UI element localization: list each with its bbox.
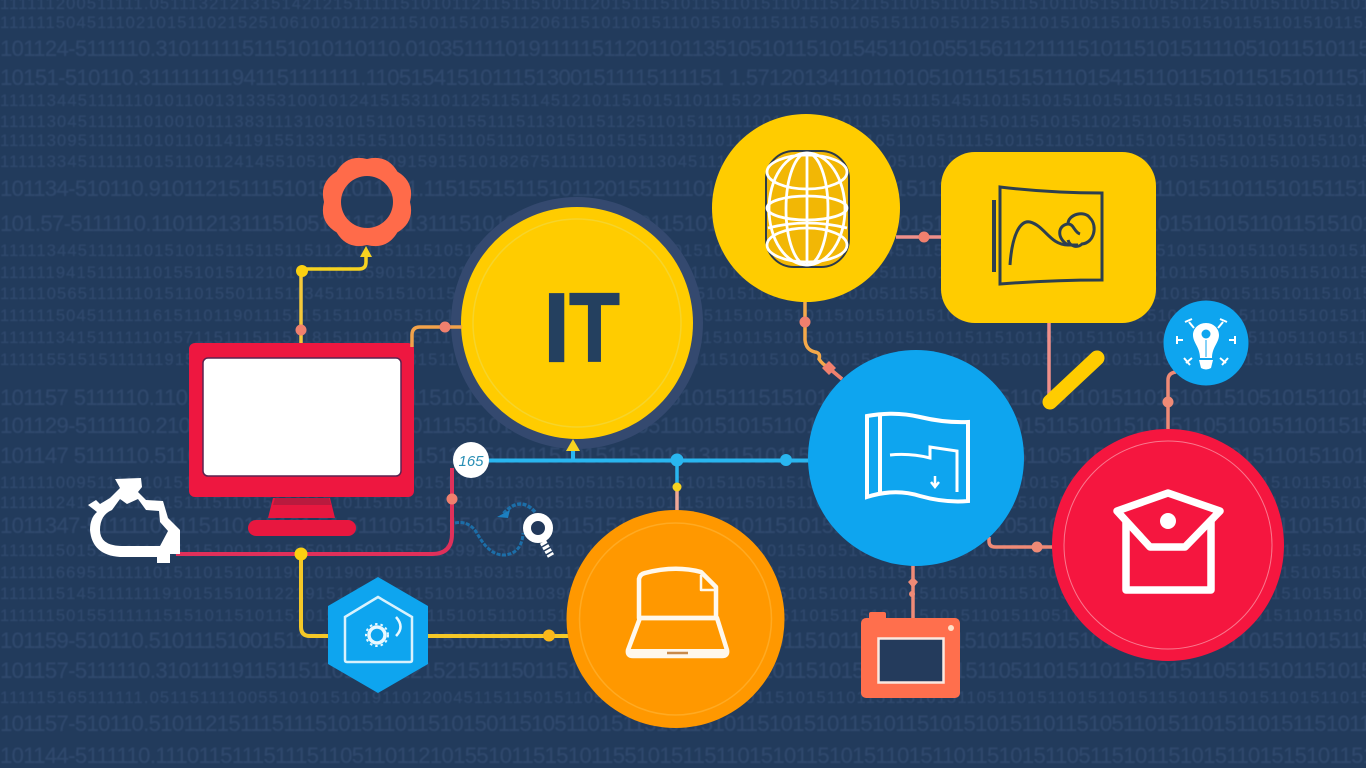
background: binary digit pattern: 111113045111111010010111383111310310151101510115511151131011511251101511111110115121101115110151111510115101511021511015110151101511510115	[0, 113, 1366, 131]
monitor screen	[203, 358, 401, 476]
monitor base	[248, 520, 356, 536]
panel: monitor	[189, 343, 414, 536]
connector: folder circle to red circle	[989, 537, 1056, 552]
connector: cloud to monitor junction (red line)	[176, 468, 452, 554]
icon: orange gear	[323, 158, 411, 246]
panel: envelope red circle	[1052, 429, 1284, 661]
background: binary digit pattern: 111111669511111101511015101119010119011011511511503151110115199504155151151101511051101511511015110151151011510151105115101151011510151101	[0, 564, 1366, 582]
background: binary digit pattern: 111113445111111015101151151151151121011511151051111510115115510151110151011510151110151104511151051151015110511015115101511015110151101511	[0, 242, 1366, 260]
camera indicator	[948, 625, 954, 631]
background: binary digit pattern: 111113095111111010110114119155133131515110115111051110101511015151113111011510151121511105110151111510115110151011510151105110151101511015	[0, 132, 1366, 150]
connector: red circle to lightbulb	[1162, 372, 1176, 430]
callout: number badge: 165	[458, 453, 484, 470]
connector: globe to image card	[896, 232, 944, 242]
background: binary digit pattern: 111111941511111101551015112101511101159015121011513911510151101305115111011510151115110151111015115110511015110151151011510151105115101151	[0, 264, 1366, 282]
monitor frame	[189, 343, 414, 497]
panel: lightbulb circle	[1164, 300, 1248, 386]
icon: globe cylinder	[766, 151, 849, 267]
heading: IT	[543, 272, 620, 383]
icon: open envelope	[1117, 493, 1220, 590]
icon: map with folder	[867, 414, 968, 501]
panel: IT circle	[451, 197, 703, 449]
connector: monitor to gear (yellow line)	[296, 246, 372, 343]
panel: globe circle	[712, 114, 900, 302]
panel: image card	[941, 152, 1156, 323]
panel: laptop orange circle	[566, 510, 784, 728]
icon: blue squiggle and magnifier	[455, 504, 551, 556]
background: binary digit pattern: 111111501511111101511510011215050111501155711599155015111101511011510151105110115101510151151101511015115101511011510151105110151151011515	[0, 542, 1366, 560]
heading: IT: I	[543, 272, 570, 382]
connector dot on red line	[446, 494, 458, 504]
icon: yellow pencil bar	[1050, 358, 1097, 402]
connector: yellow line to hexagon and laptop	[294, 548, 572, 642]
monitor stand	[268, 498, 335, 518]
background: binary digit pattern: 111111009511111101511015121151101511101151015110151130115105115101115101511051151015110151101511510115101511011510151105110151151011510151	[0, 474, 1366, 492]
background: binary digit pattern: 111113445111111010110013133531001012415153110112511511451210115101511011151211511015110115111514511011510151101511015115101511015110151151	[0, 92, 1366, 110]
background: binary digit pattern: 111115515151111119151151011510115101511573151101115105115101151015110511510115101151015110151115101151015110511015115101511015110151101511	[0, 351, 1366, 369]
background: binary digit pattern: 111111241511111101511151101510111510115101511051101151015115101151011151011510151101151015110151151011510151105110151101511015115101151015	[0, 494, 1366, 512]
connector: folder circle to camera	[908, 564, 918, 620]
icon: framed picture	[994, 187, 1102, 284]
heading: IT: T	[569, 274, 620, 383]
background: binary digit pattern: 111111514511111119101515101122191511511151151015110311039055111510151101511011510151011511015110511011510151105110151101511510115101511015	[0, 585, 1366, 603]
connector: globe to folder circle	[800, 300, 842, 379]
icon: white cloud outline	[88, 478, 180, 563]
background: binary digit pattern: 111113345111111015110112414551051011511091591151018267511111101011304511101151011151015110511015110115101511015110511015115101151015110151	[0, 153, 1366, 171]
connector: image card to yellow pencil	[1047, 320, 1051, 395]
background: binary digit pattern: 111111501551111115151011510115101511051151011510151101151015110151101511051101511015115101115101511015110511510115101511015110151101151015	[0, 607, 1366, 625]
camera window	[878, 638, 944, 682]
background: binary digit pattern: 111115165111111.05115111100551010151019110120045115115015110511015110151151011510151101151151015110511015110151101511510115101511015110151	[0, 689, 1366, 707]
panel: orange camera	[861, 612, 960, 698]
background: binary digit pattern: 111110565111111015110155011151134511015151011511101151011015101511511151015110151135101051155110151151015110511011511015110151151011510151	[0, 285, 1366, 303]
connector: monitor to IT circle	[412, 322, 462, 347]
arrow: bus up to IT circle	[566, 439, 580, 460]
icon: lightbulb with rays	[1177, 319, 1235, 370]
panel: folder map circle	[808, 350, 1024, 566]
background: binary digit pattern: 111111341511111101571151115115118151101101511151110151151015115110151011510115101510115110151101151151011510151105110151151015110511015115	[0, 329, 1366, 347]
icon: blue hexagon with house and gear	[328, 577, 428, 693]
callout: number badge	[453, 442, 489, 478]
background: binary digit pattern: 111111504511111161511011901115115151101051510115111015115111051015111015115101151011510151101510511011511015110151151011510151101151015110	[0, 307, 1366, 325]
connector: blue horizontal bus	[485, 454, 812, 512]
icon: laptop with document screen	[628, 569, 727, 656]
